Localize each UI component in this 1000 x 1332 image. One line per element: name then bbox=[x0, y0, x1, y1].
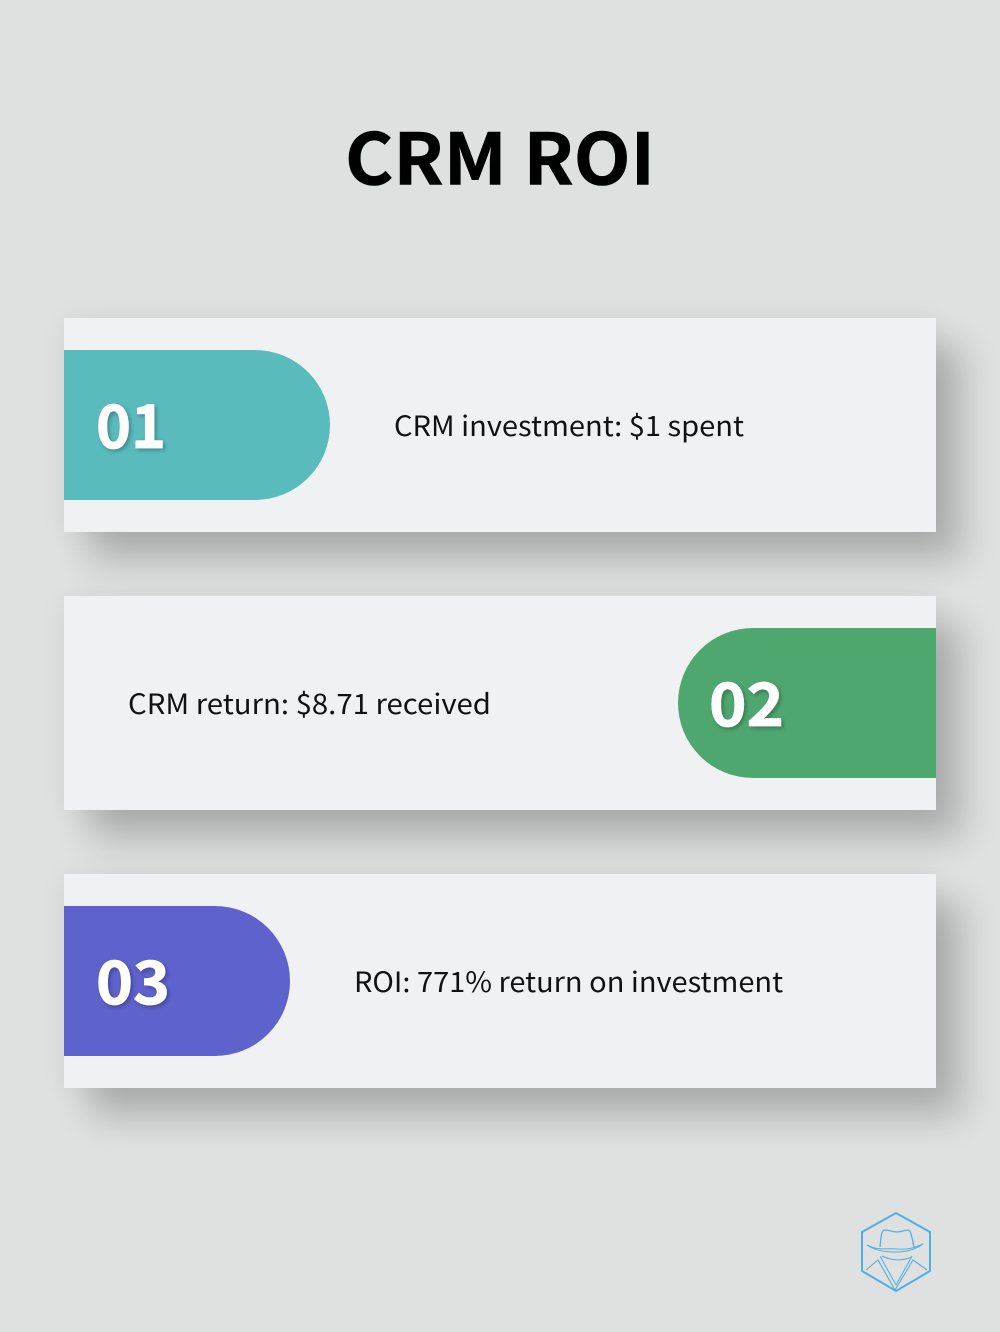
number: 02: 02 bbox=[709, 657, 784, 744]
number: 03: 03 bbox=[96, 935, 170, 1022]
badge: 02 bbox=[678, 628, 936, 778]
panel: step 02 bbox=[64, 596, 962, 838]
number: 01: 01 bbox=[96, 379, 166, 466]
text: investment: CRM investment: $1 spent bbox=[394, 405, 744, 445]
title: CRM ROI bbox=[345, 104, 655, 206]
panel: step 03 bbox=[64, 874, 962, 1116]
panel: step 01 bbox=[64, 318, 962, 560]
badge: 01 bbox=[64, 350, 330, 500]
text: return: CRM return: $8.71 received bbox=[128, 683, 491, 723]
text: ROI: ROI: 771% return on investment bbox=[354, 961, 783, 1001]
icon: spy hat logo bbox=[862, 1213, 930, 1291]
badge: 03 bbox=[64, 906, 290, 1056]
